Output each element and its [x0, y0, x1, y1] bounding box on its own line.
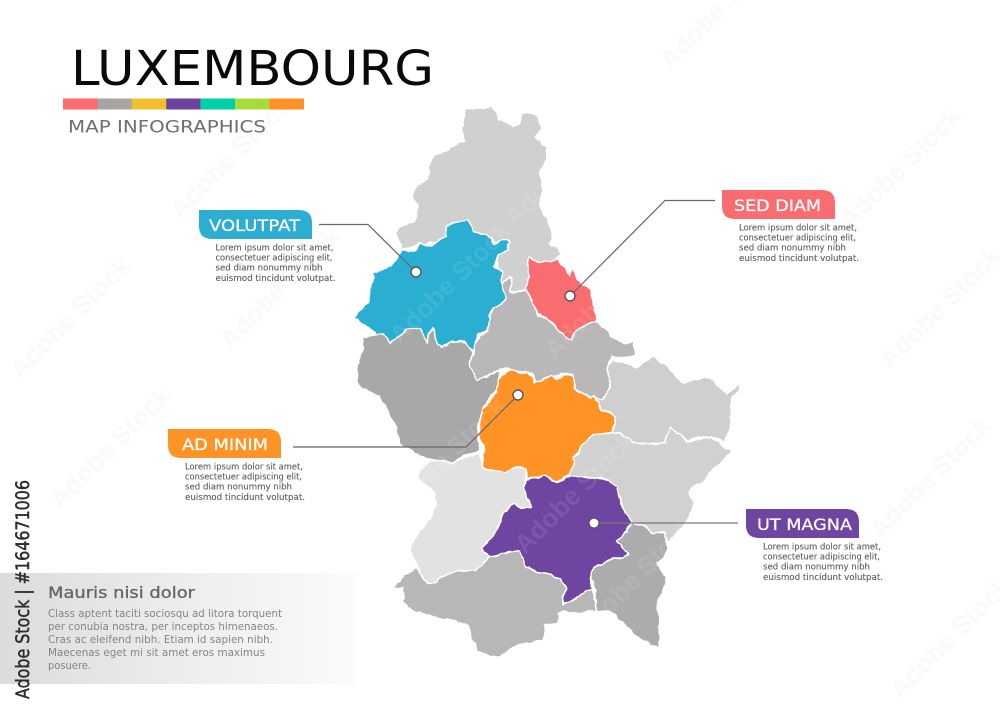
description: sed diam nonummy nibh: [763, 562, 870, 572]
description: Lorem ipsum dolor sit amet,: [185, 462, 303, 472]
label pill: [168, 429, 281, 458]
callout: volutpat: VOLUTPAT: [209, 216, 300, 235]
region: south: [392, 552, 598, 657]
panel body text: [48, 607, 283, 672]
description: Lorem ipsum dolor sit amet,: [216, 244, 334, 254]
region: east upper: [595, 355, 739, 445]
callout: ad minim: AD MINIM: [182, 435, 268, 454]
description: consectetuer adipiscing elit,: [763, 552, 880, 562]
faint map watermarks: Adobe Stock: [378, 390, 512, 524]
description: euismod tincidunt volutpat.: [763, 573, 883, 583]
region: orange: [478, 370, 616, 481]
faint background watermarks: Adobe Stock: [863, 410, 997, 544]
leader line: [293, 395, 518, 447]
title: LUXEMBOURG: [71, 41, 434, 97]
description: sed diam nonummy nibh: [739, 244, 846, 254]
faint background watermarks: Adobe Stock: [43, 380, 177, 514]
region: purple: [483, 476, 632, 605]
panel body text: Cras ac eleifend nibh. Etiam id sapien nibh.: [48, 633, 273, 646]
description: [763, 542, 883, 583]
panel body text: per conubia nostra, per inceptos himenaeos.: [48, 620, 278, 633]
description: [185, 462, 305, 503]
leader line: [594, 522, 738, 524]
label pill: [722, 190, 835, 219]
callout: sed diam: SED DIAM: [734, 196, 821, 215]
marker: [411, 267, 421, 277]
leader line: [570, 200, 715, 296]
label pill: [746, 509, 859, 538]
faint map watermarks: Adobe Stock: [498, 98, 632, 232]
leader line: [319, 224, 416, 272]
marker: [589, 518, 599, 528]
region: red: [526, 256, 596, 339]
region: blue: [354, 220, 511, 352]
region: centre north: [470, 277, 635, 400]
marker: [565, 291, 575, 301]
description: consectetuer adipiscing elit,: [739, 234, 856, 244]
description: sed diam nonummy nibh: [216, 264, 322, 274]
faint map watermarks: Adobe Stock: [383, 215, 517, 349]
description: euismod tincidunt volutpat.: [739, 254, 859, 264]
faint background watermarks: Adobe Stock: [213, 220, 347, 354]
colour strip: [63, 98, 304, 110]
description: Lorem ipsum dolor sit amet,: [739, 224, 857, 234]
callout: ut magna: UT MAGNA: [757, 515, 852, 534]
region: south-east: [590, 523, 667, 648]
panel body text: posuere.: [48, 659, 91, 672]
description: sed diam nonummy nibh: [185, 482, 292, 492]
description: [216, 244, 336, 284]
callout: sed diam: [565, 190, 859, 301]
description: [739, 224, 859, 264]
description: Lorem ipsum dolor sit amet,: [763, 542, 881, 552]
panel heading: Mauris nisi dolor: [48, 583, 195, 602]
description: consectetuer adipiscing elit,: [185, 472, 302, 482]
faint background watermarks: Adobe Stock: [163, 90, 297, 224]
description: consectetuer adipiscing elit,: [216, 254, 332, 264]
region: south-west light: [409, 452, 531, 583]
faint map watermarks: [368, 58, 702, 644]
faint map watermarks: Adobe Stock: [538, 230, 672, 364]
map of Luxembourg: [354, 104, 739, 657]
panel body text: Class aptent taciti sociosqu ad litora torquent: [48, 607, 283, 620]
description: euismod tincidunt volutpat.: [216, 274, 336, 284]
callout: volutpat: [199, 210, 421, 284]
region: west: [357, 328, 500, 463]
faint map watermarks: Adobe Stock: [368, 58, 502, 192]
marker: [513, 390, 523, 400]
callout: ut magna: [589, 509, 883, 583]
description: euismod tincidunt volutpat.: [185, 493, 305, 503]
subtitle: MAP INFOGRAPHICS: [68, 118, 266, 138]
callout: ad minim: [168, 390, 523, 503]
region: east lower: [570, 427, 732, 543]
panel body text: Maecenas eget mi sit amet eros maximus: [48, 646, 265, 659]
faint background watermarks: Adobe Stock: [3, 250, 137, 384]
watermark stock id: Adobe Stock | #164671006: [12, 480, 34, 699]
label pill: [199, 210, 312, 239]
faint background watermarks: Adobe Stock: [833, 100, 967, 234]
faint map watermarks: Adobe Stock: [568, 510, 702, 644]
region: north: [395, 104, 563, 292]
faint map watermarks: Adobe Stock: [508, 425, 642, 559]
bottom text panel: [0, 573, 356, 684]
